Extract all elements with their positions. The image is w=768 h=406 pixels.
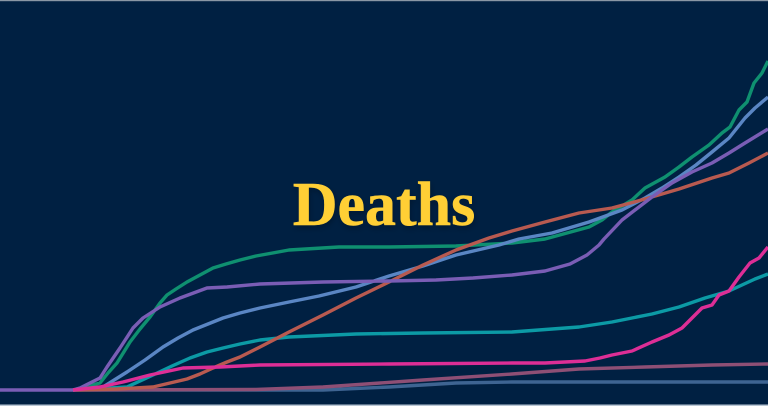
line: mauve [73,364,768,390]
line: purple [0,129,768,390]
line: steel blue [73,382,768,390]
title: Deaths [293,171,475,239]
line: green [73,61,768,390]
line: magenta [73,247,768,390]
line: blue [73,97,768,390]
line: teal [73,274,768,390]
line: red [73,153,768,390]
